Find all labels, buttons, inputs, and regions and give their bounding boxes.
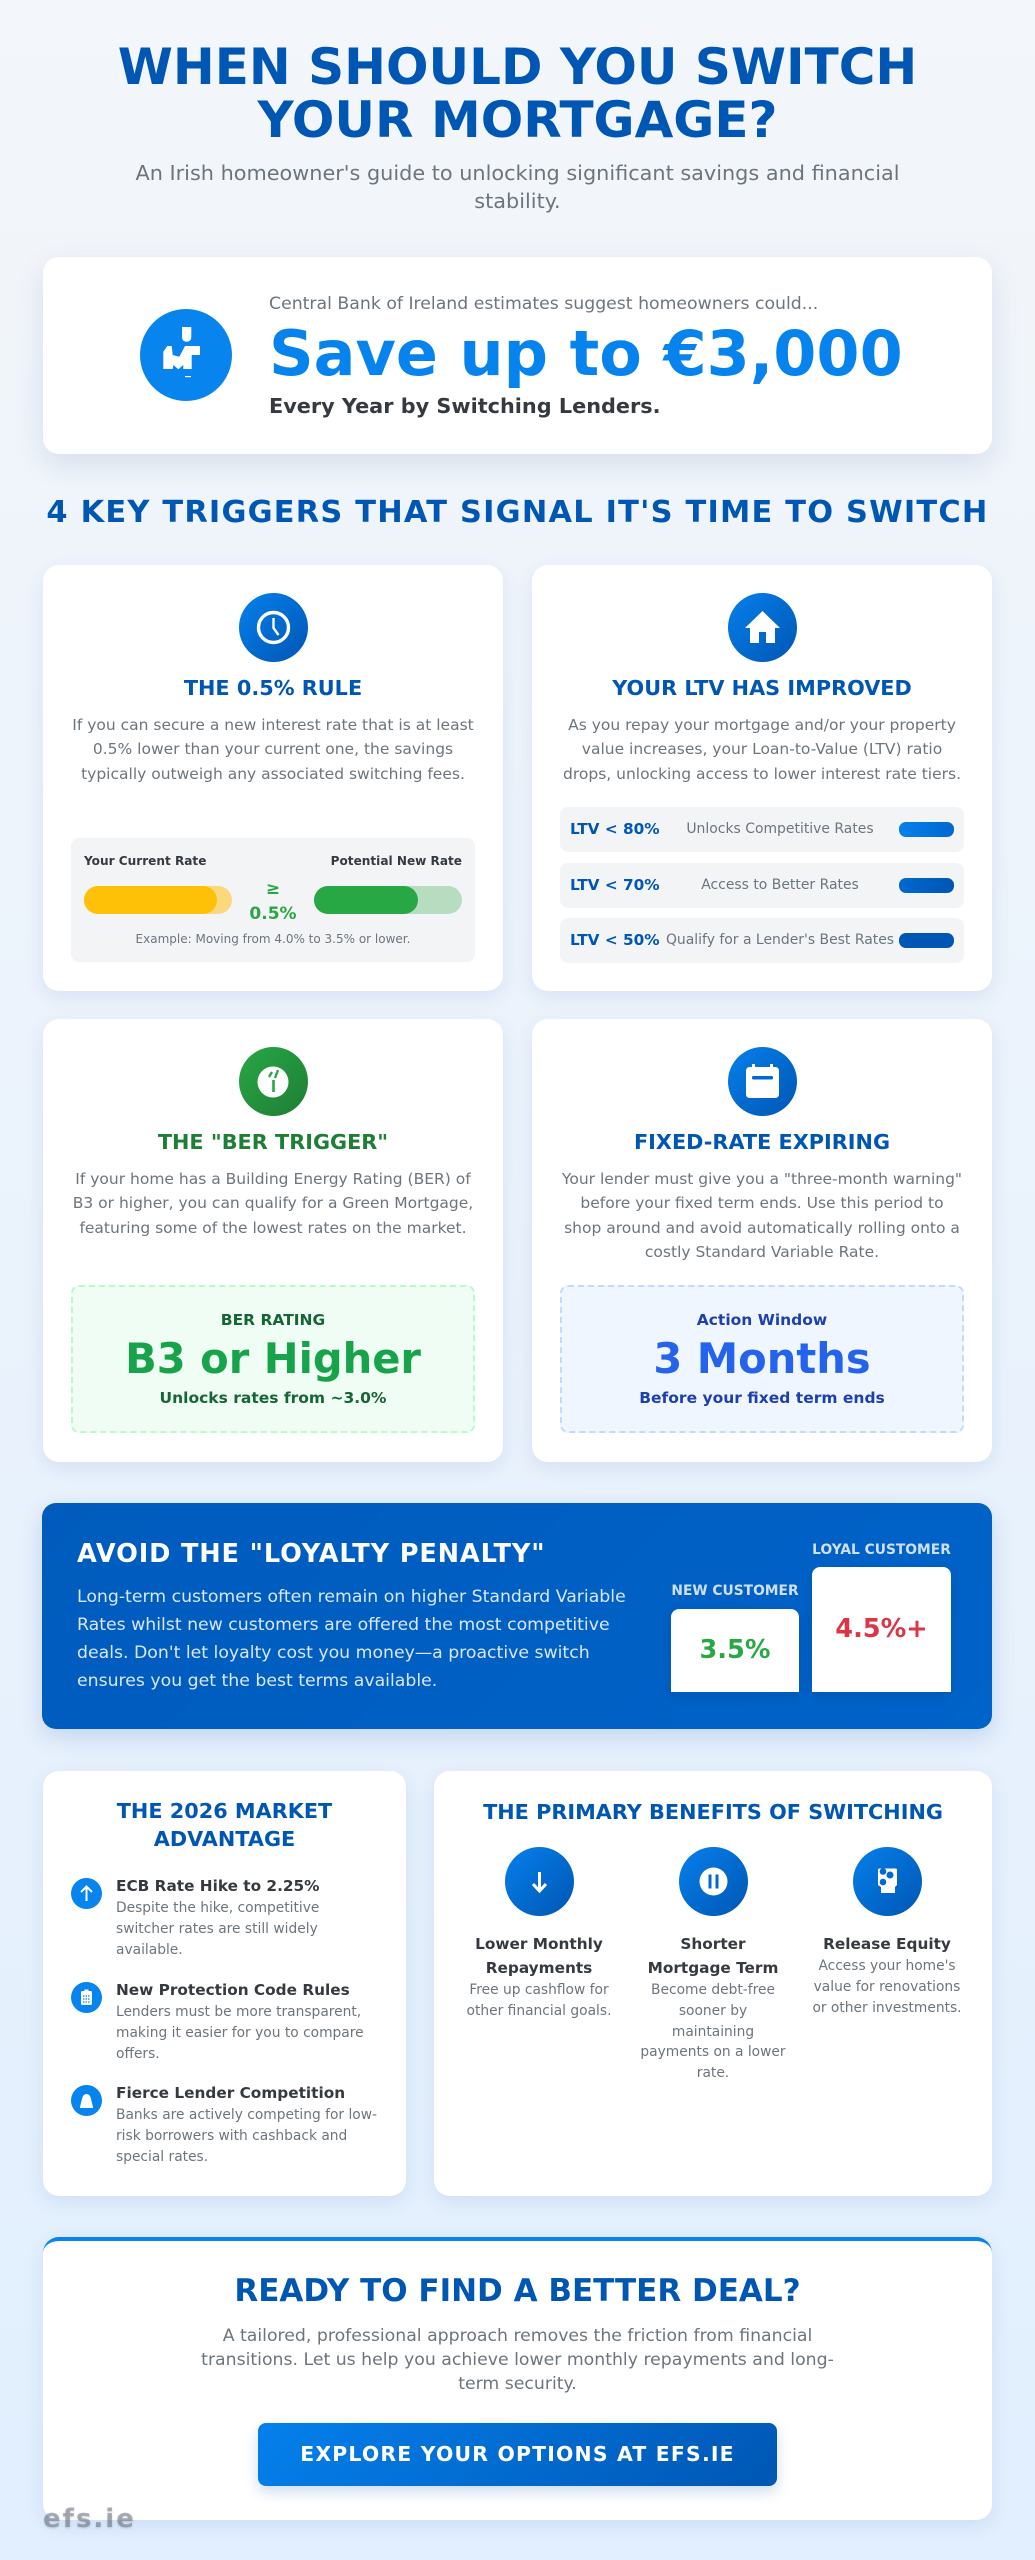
benefit text: other financial goals.: [467, 2003, 611, 2019]
description: If your home has a Building Energy Rating (BER) of: [75, 1170, 471, 1188]
new customer value: 3.5%: [700, 1635, 770, 1665]
tier text: Access to Better Rates: [701, 877, 859, 893]
button: EXPLORE YOUR OPTIONS AT EFS.IE: [300, 2442, 735, 2466]
action window callout: [560, 1285, 964, 1433]
savings caption: Every Year by Switching Lenders.: [269, 394, 661, 418]
item text: risk borrowers with cashback and: [116, 2128, 347, 2144]
icon: leaf: [239, 1047, 308, 1116]
heading: THE PRIMARY BENEFITS OF SWITCHING: [483, 1800, 943, 1824]
new customer bar: [671, 1609, 799, 1692]
heading: ADVANTAGE: [154, 1826, 295, 1850]
benefit title: Lower Monthly: [475, 1935, 603, 1953]
difference label: [249, 879, 297, 924]
item title: ECB Rate Hike to 2.25%: [116, 1877, 320, 1895]
heading: YOUR LTV HAS IMPROVED: [612, 676, 912, 700]
market item 1: [71, 1877, 320, 1958]
button: [258, 2423, 777, 2486]
LTV row 80: [560, 807, 964, 852]
benefit 2: [640, 1847, 786, 2081]
benefit title: Mortgage Term: [648, 1959, 778, 1977]
tier text: Qualify for a Lender's Best Rates: [666, 932, 894, 948]
description: [563, 716, 961, 783]
title: YOUR MORTGAGE?: [258, 90, 778, 148]
difference label: ≥: [266, 879, 280, 899]
loyal customer label: LOYAL CUSTOMER: [812, 1542, 951, 1558]
panel: market advantage: [43, 1771, 406, 2196]
item text: special rates.: [116, 2149, 208, 2165]
market item 2: [71, 1981, 364, 2062]
panel: fixed-rate expiring: [532, 1019, 992, 1462]
new customer label: NEW CUSTOMER: [671, 1583, 799, 1599]
heading: THE 0.5% RULE: [184, 676, 362, 700]
icon: clock: [239, 593, 308, 662]
callout value: B3 or Higher: [125, 1334, 421, 1383]
new rate label: Potential New Rate: [331, 854, 462, 868]
description: shop around and avoid automatically rolling onto a: [564, 1219, 960, 1237]
loyal customer bar: [812, 1567, 951, 1692]
benefit text: [812, 1958, 962, 2016]
icon: calendar: [728, 1047, 797, 1116]
benefit title: Shorter: [680, 1935, 746, 1953]
item text: Lenders must be more transparent,: [116, 2004, 361, 2020]
tier label: LTV < 70%: [570, 876, 660, 894]
panel: BER trigger: [43, 1019, 503, 1462]
icon: savings: [140, 309, 232, 401]
LTV row 70: [560, 863, 964, 908]
title: WHEN SHOULD YOU SWITCH: [118, 38, 917, 96]
heading: AVOID THE "LOYALTY PENALTY": [77, 1539, 545, 1569]
description: As you repay your mortgage and/or your property: [568, 716, 956, 734]
description: Your lender must give you a "three-month warning": [562, 1170, 962, 1188]
benefit 1: [467, 1847, 611, 2019]
description: [72, 716, 474, 783]
item text: offers.: [116, 2046, 160, 2062]
heading: [116, 1799, 332, 1850]
item text: [116, 1900, 319, 1958]
callout note: Before your fixed term ends: [639, 1389, 885, 1407]
item text: [116, 2004, 364, 2062]
callout note: Unlocks rates from ~3.0%: [160, 1389, 386, 1407]
benefit text: [640, 1982, 786, 2081]
tier bar: [899, 933, 954, 948]
market item 3: [71, 2084, 377, 2165]
example note: Example: Moving from 4.0% to 3.5% or lower.: [136, 932, 410, 946]
description: value increases, your Loan-to-Value (LTV) ratio: [582, 740, 942, 758]
benefit text: Become debt-free: [651, 1982, 775, 1998]
description: [77, 1587, 626, 1691]
callout label: BER RATING: [221, 1311, 325, 1329]
rate comparison chart: [71, 838, 475, 962]
heading: READY TO FIND A BETTER DEAL?: [234, 2273, 801, 2309]
subtitle: stability.: [474, 189, 561, 213]
tier label: LTV < 50%: [570, 931, 660, 949]
icon: clipboard: [71, 1982, 102, 2013]
description: drops, unlocking access to lower interest rate tiers.: [563, 765, 961, 783]
loyal customer value: 4.5%+: [835, 1614, 928, 1644]
callout value: 3 Months: [653, 1334, 871, 1383]
description: ensures you get the best terms available.: [77, 1671, 437, 1691]
benefit title: [648, 1935, 778, 1977]
title: [118, 38, 917, 148]
description: 0.5% lower than your current one, the savings: [93, 740, 453, 758]
benefit 3: [812, 1847, 962, 2016]
description: Long-term customers often remain on higher Standard Variable: [77, 1587, 626, 1607]
description: transitions. Let us help you achieve lower monthly repayments and long-: [201, 2350, 834, 2370]
panel: 0.5% rule: [43, 565, 503, 991]
item text: switcher rates are still widely: [116, 1921, 318, 1937]
item title: Fierce Lender Competition: [116, 2084, 345, 2102]
subtitle: [135, 161, 900, 213]
icon: equity: [853, 1847, 922, 1916]
benefit title: Release Equity: [823, 1935, 951, 1953]
LTV row 50: [560, 918, 964, 963]
tier label: LTV < 80%: [570, 820, 660, 838]
benefit text: rate.: [697, 2065, 729, 2081]
icon: arrow up: [71, 1878, 102, 1909]
current rate label: Your Current Rate: [84, 854, 206, 868]
item text: Banks are actively competing for low-: [116, 2107, 377, 2123]
savings intro: Central Bank of Ireland estimates suggest homeowners could...: [269, 294, 818, 314]
description: B3 or higher, you can qualify for a Green Mortgage,: [73, 1194, 473, 1212]
description: deals. Don't let loyalty cost you money—a proactive switch: [77, 1643, 590, 1663]
benefit text: value for renovations: [814, 1979, 960, 1995]
description: Rates whilst new customers are offered the most competitive: [77, 1615, 610, 1635]
description: [201, 2326, 834, 2394]
tier text: Unlocks Competitive Rates: [686, 821, 874, 837]
tier bar: [899, 878, 954, 893]
item text: Despite the hike, competitive: [116, 1900, 319, 1916]
savings figure: Save up to €3,000: [269, 317, 903, 390]
benefit title: [475, 1935, 603, 1977]
item title: New Protection Code Rules: [116, 1981, 350, 1999]
section heading: triggers: 4 KEY TRIGGERS THAT SIGNAL IT'S TIME TO SWITCH: [46, 495, 989, 530]
benefit text: maintaining: [672, 2024, 754, 2040]
benefit text: Free up cashflow for: [469, 1982, 609, 1998]
difference label: 0.5%: [249, 904, 297, 924]
icon: pause: [679, 1847, 748, 1916]
icon: arrow down: [505, 1847, 574, 1916]
panel: savings hero: [43, 257, 992, 454]
benefit text: or other investments.: [812, 2000, 962, 2016]
description: [562, 1170, 962, 1261]
heading: THE 2026 MARKET: [117, 1799, 332, 1823]
panel: LTV: [532, 565, 992, 991]
item text: available.: [116, 1942, 183, 1958]
BER rating callout: [71, 1285, 475, 1433]
panel: loyalty penalty: [42, 1503, 992, 1729]
icon: bell: [71, 2085, 102, 2116]
benefit text: Access your home's: [818, 1958, 956, 1974]
benefit title: Repayments: [486, 1959, 592, 1977]
new rate bar: [314, 886, 462, 914]
panel: primary benefits: [434, 1771, 992, 2196]
heading: FIXED-RATE EXPIRING: [634, 1130, 890, 1154]
icon: house: [728, 593, 797, 662]
benefit text: [467, 1982, 611, 2019]
description: [73, 1170, 473, 1237]
benefit text: payments on a lower: [640, 2044, 786, 2060]
item text: [116, 2107, 377, 2165]
watermark: efs.ie: [43, 2504, 136, 2534]
description: If you can secure a new interest rate that is at least: [72, 716, 474, 734]
description: featuring some of the lowest rates on the market.: [79, 1219, 467, 1237]
heading: THE "BER TRIGGER": [158, 1130, 388, 1154]
panel: call to action: [43, 2237, 992, 2520]
subtitle: An Irish homeowner's guide to unlocking significant savings and financial: [135, 161, 900, 185]
current rate bar: [84, 886, 232, 914]
callout label: Action Window: [697, 1311, 827, 1329]
benefit text: sooner by: [679, 2003, 747, 2019]
bar chart: rates: [670, 1542, 952, 1697]
description: costly Standard Variable Rate.: [645, 1243, 879, 1261]
description: typically outweigh any associated switching fees.: [81, 765, 465, 783]
description: A tailored, professional approach removes the friction from financial: [223, 2326, 812, 2346]
description: term security.: [458, 2374, 577, 2394]
tier bar: [899, 822, 954, 837]
item text: making it easier for you to compare: [116, 2025, 364, 2041]
description: before your fixed term ends. Use this period to: [580, 1194, 944, 1212]
